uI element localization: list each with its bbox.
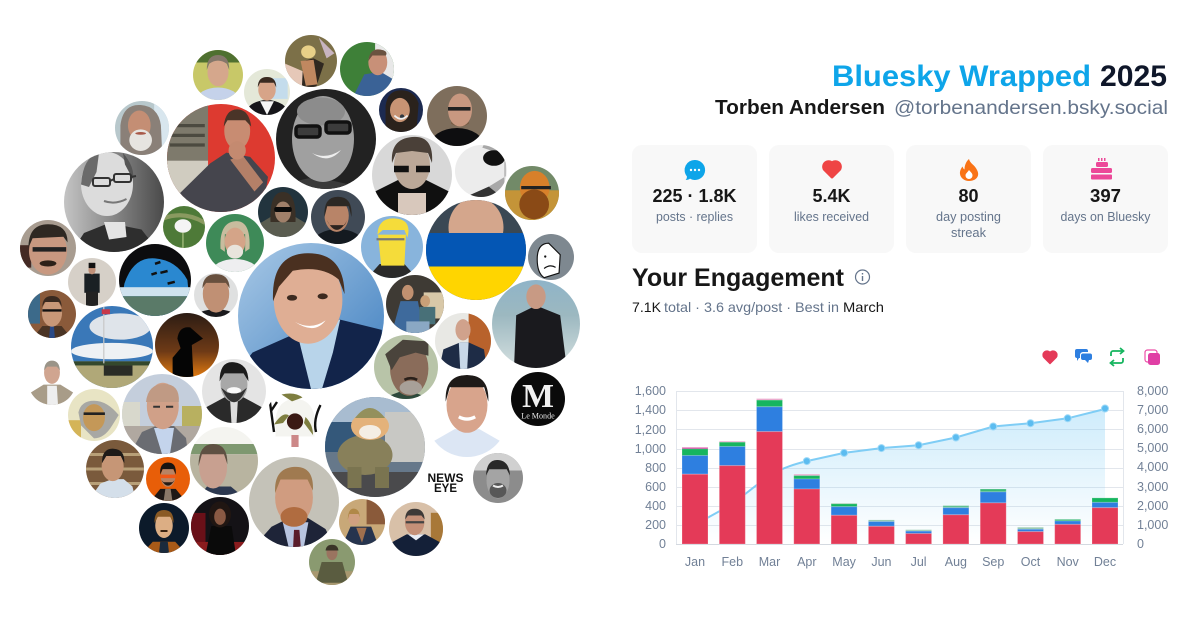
right axis labels: 4,000 — [1137, 460, 1168, 474]
avatar: Le Monde logo: M — [522, 378, 554, 415]
month labels: Apr — [797, 555, 817, 569]
avatar cluster — [20, 35, 580, 585]
avatar: dark haired bearded man — [311, 190, 365, 244]
avatar: grayscale man with beard — [473, 453, 523, 503]
panel: day posting streak: 80 — [958, 186, 979, 206]
panel: day posting streak: day posting — [936, 209, 1001, 224]
avatar: man in sunglasses — [258, 187, 308, 237]
left axis labels: 1,600 — [635, 384, 666, 398]
month labels: Jun — [871, 555, 892, 569]
logo: News Eye: EYE — [434, 481, 457, 495]
right axis labels: 7,000 — [1137, 403, 1168, 417]
avatar: cartoon face sketch — [528, 234, 574, 280]
legend — [1043, 348, 1160, 366]
user name and handle: @torbenandersen.bsky.social — [894, 97, 1168, 119]
avatar: man in garden — [340, 42, 394, 96]
bars: Oct — [1018, 527, 1044, 544]
month labels: Sep — [982, 555, 1004, 569]
grid lines — [676, 391, 1124, 544]
right axis labels: 6,000 — [1137, 422, 1168, 436]
avatar: cave with birds — [119, 244, 191, 316]
avatar: bald man in suit with lanyard — [122, 374, 202, 454]
avatar: man in front of bookshelf — [86, 440, 144, 498]
left axis labels: 1,400 — [635, 403, 666, 417]
engagement summary — [632, 299, 884, 315]
right axis labels — [1137, 384, 1168, 551]
month labels: Jul — [911, 555, 927, 569]
avatar: man with microphone — [379, 88, 423, 132]
left axis labels: 800 — [645, 461, 666, 475]
avatar: man by the sea — [492, 280, 580, 368]
panel: likes received: 5.4K — [812, 186, 850, 206]
panel: day posting streak — [906, 145, 1031, 253]
avatar: soldier in nature — [309, 539, 355, 585]
avatar: woman in black on stage — [191, 497, 249, 555]
month labels: Nov — [1057, 555, 1080, 569]
user name and handle — [715, 97, 1168, 119]
avatar: black and white profile — [455, 145, 507, 197]
avatar: red haired man in suit — [249, 457, 339, 547]
avatar: grey bearded man — [115, 101, 170, 155]
panel: posts and replies: posts · replies — [656, 209, 733, 224]
logo: News Eye — [428, 471, 464, 495]
avatar: man in black suit — [244, 69, 290, 115]
left axis labels: 1,000 — [635, 442, 666, 456]
avatar: yellow cartoon man — [361, 216, 423, 278]
bars: Nov — [1055, 519, 1081, 544]
cumulative area — [695, 409, 1105, 544]
avatar: white ghost illustration — [269, 394, 322, 447]
avatar: main profile photo — [238, 243, 384, 389]
panel: likes received: likes received — [794, 209, 869, 224]
right axis labels: 1,000 — [1137, 518, 1168, 532]
month labels: Feb — [722, 555, 743, 569]
icon: info — [856, 270, 870, 284]
panel: day posting streak: streak — [951, 225, 986, 240]
avatar: grayscale man with glasses — [64, 152, 164, 252]
panel: posts and replies — [632, 145, 757, 253]
avatar: orange background illustration — [146, 457, 190, 501]
icon: reposts legend — [1110, 348, 1124, 366]
month labels: Aug — [945, 555, 967, 569]
bars: May — [831, 503, 857, 544]
avatar: beach photo — [285, 35, 337, 87]
right axis labels: 2,000 — [1137, 499, 1168, 513]
left axis labels: 600 — [645, 480, 666, 494]
avatar: bald man in black — [427, 86, 487, 146]
month labels: Dec — [1094, 555, 1116, 569]
avatar: man at chalkboard — [206, 214, 264, 272]
avatar: smiling man in light shirt — [434, 375, 500, 457]
avatar: man in navy sweater — [389, 502, 443, 556]
panel: days on Bluesky: days on Bluesky — [1060, 209, 1151, 224]
left axis labels — [635, 384, 666, 551]
avatar: person in uniform — [68, 258, 116, 306]
avatar: man in library — [28, 290, 76, 338]
month labels: Oct — [1021, 555, 1041, 569]
icon: heart — [824, 162, 840, 177]
bars: Jan — [682, 447, 708, 544]
right axis labels: 3,000 — [1137, 480, 1168, 494]
avatar: silhouette at sunset — [155, 313, 219, 377]
avatar: illustrated man with cap — [68, 389, 120, 441]
month labels: Jan — [685, 555, 705, 569]
bars: Mar — [756, 399, 782, 544]
avatar: illustrated man with moustache — [139, 503, 189, 553]
icon: birthday cake — [1091, 158, 1112, 180]
chart: monthly engagement stacked bars with cumulative line — [635, 384, 1168, 569]
panel: days on Bluesky: 397 — [1090, 186, 1121, 206]
bars: Apr — [794, 474, 820, 544]
left axis labels: 200 — [645, 518, 666, 532]
logo: News Eye: NEWS — [428, 471, 464, 485]
icon: replies legend — [1075, 349, 1092, 363]
avatar: man with glasses and cup — [372, 135, 452, 215]
avatar: laughing bearded man in leather — [202, 359, 266, 423]
header title: Bluesky Wrapped — [832, 60, 1091, 93]
bars: Jun — [868, 520, 894, 544]
right axis labels: 8,000 — [1137, 384, 1168, 398]
icon: heart legend — [1043, 351, 1057, 364]
avatar: speaker on red wall — [167, 104, 275, 212]
right axis labels: 0 — [1137, 537, 1144, 551]
avatar: man in black collar — [194, 273, 238, 317]
avatar: man by a lake — [190, 427, 258, 495]
month labels: May — [832, 555, 857, 569]
panel: posts and replies: 225 · 1.8K — [652, 186, 736, 206]
avatar: flagpole landscape — [71, 306, 153, 388]
left axis labels: 0 — [659, 537, 666, 551]
avatar: woman with scarf — [339, 499, 385, 545]
avatar: doge in camouflage — [325, 397, 425, 497]
heading: your engagement: Your Engagement — [632, 264, 845, 292]
avatar: Le Monde logo — [511, 372, 565, 426]
left axis labels: 400 — [645, 499, 666, 513]
bars: Sep — [980, 489, 1006, 544]
panel: days on Bluesky — [1043, 145, 1168, 253]
left axis labels: 1,200 — [635, 423, 666, 437]
right axis labels: 5,000 — [1137, 441, 1168, 455]
engagement summary: 7.1K — [632, 299, 662, 315]
avatar: white flower — [163, 206, 205, 248]
panel: likes received — [769, 145, 894, 253]
bars: Aug — [943, 506, 969, 544]
month labels: Mar — [759, 555, 780, 569]
bars: Feb — [719, 441, 745, 544]
icon: quotes legend — [1145, 350, 1160, 365]
avatar: man with green background — [193, 50, 243, 100]
header title: 2025 — [1100, 60, 1167, 93]
avatar: man with moustache selfie — [20, 220, 76, 276]
engagement summary: March — [843, 299, 884, 315]
avatar: black and white smiling man — [276, 89, 376, 189]
avatar: man with Ukrainian flag — [426, 198, 526, 300]
user name and handle: Torben Andersen — [715, 97, 885, 119]
avatar: grim man with long hair — [374, 335, 438, 399]
engagement summary: total · 3.6 avg/post · Best in — [664, 299, 839, 315]
avatar: men at workshop — [386, 275, 444, 333]
bars: Dec — [1092, 498, 1118, 544]
bars: Jul — [906, 530, 932, 544]
avatar: man in suit with brown shelf — [435, 313, 491, 369]
icon: flame — [960, 159, 978, 181]
month labels — [685, 555, 1116, 569]
avatar: bearded bald illustrated man — [505, 166, 559, 220]
cumulative line — [695, 405, 1108, 525]
avatar: older man, white background — [31, 360, 73, 405]
icon: speech bubble — [685, 160, 705, 180]
